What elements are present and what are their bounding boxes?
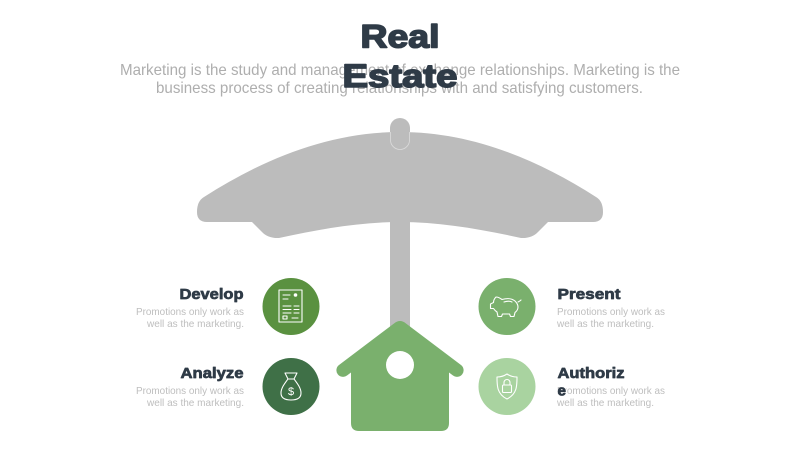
item: Analyze bbox=[136, 358, 320, 415]
item: Present bbox=[478, 278, 665, 335]
subtitle bbox=[120, 62, 680, 97]
umbrella pole bbox=[390, 222, 410, 334]
icon: money bag bbox=[262, 358, 320, 415]
house window bbox=[386, 351, 414, 379]
heading: Analyze: Analyze bbox=[180, 365, 244, 382]
subtitle: business process of creating relationships with and satisfying customers. bbox=[156, 80, 643, 97]
description: Authorize: well as the marketing. bbox=[556, 397, 654, 409]
description: Present: Promotions only work as bbox=[557, 306, 665, 318]
heading: Authorize: Authoriz bbox=[558, 365, 624, 382]
icon: money bag: $ bbox=[288, 386, 294, 398]
icon: shield lock bbox=[478, 358, 536, 415]
description: Develop: Promotions only work as bbox=[136, 306, 244, 318]
item: Authorize bbox=[478, 358, 665, 415]
title: Real bbox=[360, 18, 440, 54]
heading: Authorize: e bbox=[558, 382, 566, 400]
item: Develop bbox=[136, 278, 320, 335]
description: Authorize: Promotions only work as bbox=[557, 385, 665, 397]
umbrella tip bbox=[390, 118, 410, 150]
heading: Present: Present bbox=[558, 286, 621, 303]
heading: Authorize bbox=[558, 365, 624, 400]
umbrella canopy bbox=[197, 132, 603, 238]
description: Analyze bbox=[136, 385, 244, 409]
icon: document bbox=[262, 278, 320, 335]
description: Analyze: Promotions only work as bbox=[136, 385, 244, 397]
icon: piggy bank bbox=[478, 278, 536, 335]
description: Present: well as the marketing. bbox=[556, 318, 654, 330]
title bbox=[342, 18, 458, 94]
description: Analyze: well as the marketing. bbox=[146, 397, 244, 409]
description: Present bbox=[556, 306, 665, 330]
description: Develop bbox=[136, 306, 244, 330]
umbrella illustration bbox=[197, 118, 603, 334]
title: Estate bbox=[342, 58, 458, 94]
heading: Develop: Develop bbox=[180, 286, 244, 303]
house bbox=[336, 321, 464, 431]
description: Authorize bbox=[556, 385, 665, 409]
subtitle: Marketing is the study and management of exchange relationships. Marketing is the bbox=[120, 62, 680, 79]
description: Develop: well as the marketing. bbox=[146, 318, 244, 330]
